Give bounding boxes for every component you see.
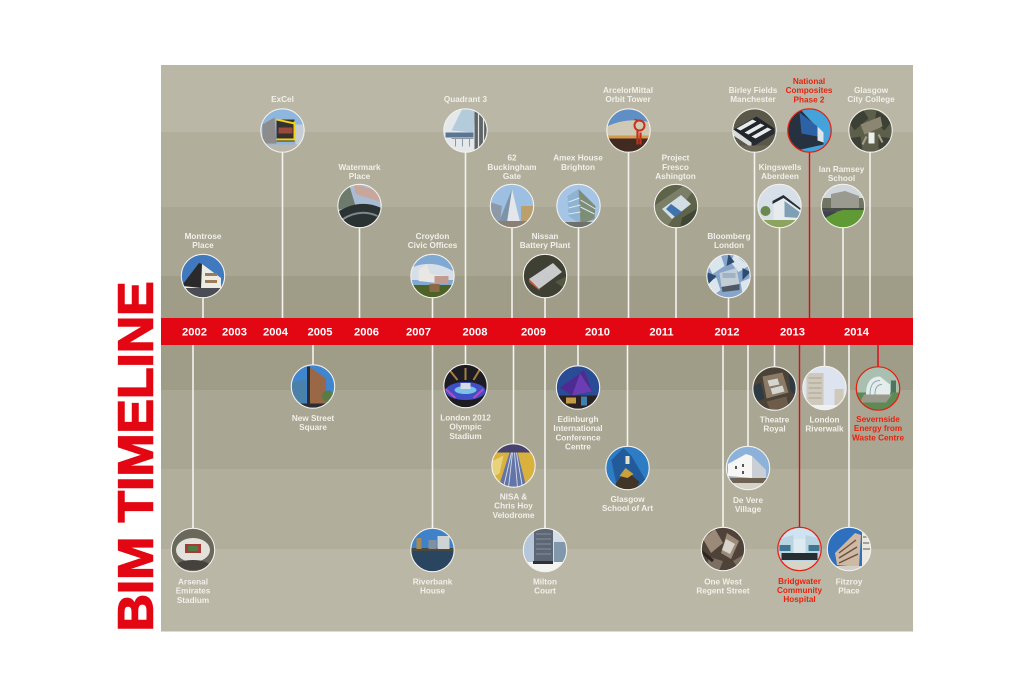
project: Project Fresco Ashington (2011): Ashington <box>655 172 696 181</box>
project: Montrose Place (2002): Montrose <box>185 232 222 241</box>
timeline bar with years: 2014 <box>844 326 870 338</box>
project: Watermark Place (2006): Watermark <box>338 163 381 172</box>
project: Nissan Battery Plant (2009): Nissan <box>532 232 558 241</box>
project: Quadrant 3 (2008): Quadrant 3 <box>444 95 488 104</box>
project: NISA and Chris Hoy Velodrome (2009): Velodrome <box>493 511 535 520</box>
timeline bar with years: 2002 <box>182 326 207 338</box>
project: Riverbank House (2007): Riverbank <box>413 578 453 586</box>
timeline bar with years: 2004 <box>263 326 289 338</box>
timeline bar with years: 2009 <box>521 326 546 338</box>
project: Ian Ramsey School (2014) <box>819 165 865 318</box>
project: Milton Court (2009): Milton <box>533 578 557 586</box>
project: London 2012 Olympic Stadium (2008): Olympic <box>449 423 482 432</box>
project: 62 Buckingham Gate (2008) <box>487 154 537 318</box>
project: Project Fresco Ashington (2011): Fresco <box>662 163 689 172</box>
project: London Riverwalk (2013) <box>802 345 846 434</box>
project: London 2012 Olympic Stadium (2008): London 2012 <box>440 414 491 422</box>
project: NISA and Chris Hoy Velodrome (2009): NISA & <box>500 492 527 502</box>
timeline bar with years: 2011 <box>649 326 674 338</box>
project: Birley Fields Manchester (2013): Birley Fields <box>729 86 778 95</box>
project: Watermark Place (2006) <box>338 163 382 318</box>
project: Severnside Energy from Waste Centre (2014, highlighted): Severnside <box>856 415 900 424</box>
project: Ian Ramsey School (2014): School <box>828 174 855 183</box>
project: Bloomberg London (2012) <box>706 232 751 318</box>
project: Edinburgh International Conference Centre (2010) <box>553 345 603 452</box>
project: Birley Fields Manchester (2013) <box>729 86 778 318</box>
project: Glasgow City College (2014): City College <box>847 95 895 104</box>
project: Edinburgh International Conference Centre (2010): Centre <box>565 443 591 452</box>
project: New Street Square (2005): New Street <box>292 414 334 423</box>
project: Theatre Royal (2013): Theatre <box>760 416 790 424</box>
project: Theatre Royal (2013): Royal <box>763 425 786 434</box>
project: Croydon Civic Offices (2007): Civic Offices <box>408 241 458 250</box>
project: Arsenal Emirates Stadium (2002) <box>171 345 215 605</box>
project: Kingswells Aberdeen (2013) <box>758 163 802 318</box>
project: Quadrant 3 (2008) <box>444 95 488 318</box>
project: Theatre Royal (2013) <box>752 345 796 434</box>
project: Severnside Energy from Waste Centre (2014, highlighted): Waste Centre <box>852 433 904 442</box>
project: London Riverwalk (2013): Riverwalk <box>805 425 844 434</box>
project: ArcelorMittal Orbit Tower (2010): ArcelorMittal <box>603 86 653 95</box>
project: Fitzroy Place (2014): Fitzroy <box>836 578 863 586</box>
project: One West Regent Street (2012): Regent Street <box>696 587 750 596</box>
project: Severnside Energy from Waste Centre (2014, highlighted) <box>852 345 904 442</box>
project: Glasgow School of Art (2010) <box>602 345 653 513</box>
timeline bar with years: 2005 <box>308 326 332 338</box>
project: One West Regent Street (2012): One West <box>704 578 742 586</box>
project: National Composites Phase 2 (2013, highlighted) <box>786 77 833 318</box>
project: Birley Fields Manchester (2013): Manchester <box>730 95 777 104</box>
timeline bar with years: 2006 <box>354 326 379 338</box>
project: Milton Court (2009): Court <box>534 587 556 596</box>
project: ArcelorMittal Orbit Tower (2010): Orbit Tower <box>605 95 651 104</box>
project: New Street Square (2005) <box>291 345 335 432</box>
project: Bridgwater Community Hospital (2013, highlighted) <box>777 345 822 604</box>
project: Bloomberg London (2012): London <box>714 241 744 250</box>
title: BIM Timeline: BIM TIMELINE <box>110 281 164 631</box>
project: Kingswells Aberdeen (2013): Kingswells <box>759 163 802 172</box>
project: Arsenal Emirates Stadium (2002): Emirates <box>176 587 211 596</box>
project: Glasgow City College (2014): Glasgow <box>854 86 889 95</box>
project: Fitzroy Place (2014): Place <box>838 587 860 596</box>
project: Croydon Civic Offices (2007) <box>408 232 458 318</box>
project: 62 Buckingham Gate (2008): Gate <box>503 172 522 181</box>
project: De Vere Village (2012): Village <box>735 505 762 514</box>
project: London 2012 Olympic Stadium (2008): Stadium <box>449 432 482 441</box>
project: Milton Court (2009) <box>523 345 567 596</box>
project: Bloomberg London (2012): Bloomberg <box>707 232 751 241</box>
project: National Composites Phase 2 (2013, highlighted): Composites <box>786 86 833 95</box>
project: Fitzroy Place (2014) <box>827 345 871 596</box>
project: Edinburgh International Conference Centre (2010): International <box>553 424 603 433</box>
project: National Composites Phase 2 (2013, highlighted): Phase 2 <box>794 95 825 104</box>
project: Amex House Brighton (2010) <box>553 154 603 318</box>
timeline bar with years: 2010 <box>585 326 610 338</box>
project: ExCel (2004): ExCel <box>271 95 294 104</box>
timeline bar with years: 2007 <box>406 326 431 338</box>
project: Montrose Place (2002) <box>181 232 225 318</box>
project: Arsenal Emirates Stadium (2002): Arsenal <box>178 578 208 586</box>
project: Riverbank House (2007): House <box>420 587 445 596</box>
project: Bridgwater Community Hospital (2013, highlighted): Bridgwater <box>778 577 822 586</box>
panel: striped background <box>161 65 913 632</box>
timeline bar with years: 2013 <box>780 326 805 338</box>
project: De Vere Village (2012): De Vere <box>733 496 763 505</box>
project: Riverbank House (2007) <box>410 345 454 596</box>
project: Glasgow School of Art (2010): Glasgow <box>610 495 645 504</box>
project: De Vere Village (2012) <box>726 345 770 514</box>
project: Montrose Place (2002): Place <box>192 241 214 250</box>
project: London Riverwalk (2013): London <box>809 416 840 424</box>
timeline bar with years: 2008 <box>463 326 487 338</box>
project: ExCel (2004) <box>260 95 304 318</box>
project: 62 Buckingham Gate (2008): Buckingham <box>487 163 537 172</box>
project: Amex House Brighton (2010): Amex House <box>553 154 603 163</box>
project: Croydon Civic Offices (2007): Croydon <box>416 232 449 241</box>
project: Severnside Energy from Waste Centre (2014, highlighted): Energy from <box>854 424 902 433</box>
timeline bar with years: 2012 <box>715 326 739 338</box>
project: Bridgwater Community Hospital (2013, highlighted): Hospital <box>783 595 816 604</box>
project: Ian Ramsey School (2014): Ian Ramsey <box>819 165 865 174</box>
project: ArcelorMittal Orbit Tower (2010) <box>603 86 653 318</box>
project: Glasgow City College (2014) <box>847 86 895 318</box>
project: Nissan Battery Plant (2009) <box>520 232 571 318</box>
timeline bar with years: 2003 <box>222 326 247 338</box>
timeline bar with years <box>161 318 913 345</box>
project: Edinburgh International Conference Centre (2010): Conference <box>555 433 601 442</box>
project: Watermark Place (2006): Place <box>349 172 371 181</box>
project: NISA and Chris Hoy Velodrome (2009) <box>492 345 536 520</box>
project: National Composites Phase 2 (2013, highlighted): National <box>793 77 825 86</box>
project: 62 Buckingham Gate (2008): 62 <box>507 154 517 163</box>
project: New Street Square (2005): Square <box>299 423 327 432</box>
project: Kingswells Aberdeen (2013): Aberdeen <box>761 172 799 181</box>
project: Arsenal Emirates Stadium (2002): Stadium <box>177 596 209 605</box>
project: London 2012 Olympic Stadium (2008) <box>440 345 491 441</box>
project: One West Regent Street (2012) <box>696 345 750 596</box>
project: Bridgwater Community Hospital (2013, highlighted): Community <box>777 586 822 595</box>
project: Project Fresco Ashington (2011): Project <box>662 154 690 163</box>
project: Glasgow School of Art (2010): School of Art <box>602 504 653 513</box>
project: Nissan Battery Plant (2009): Battery Plant <box>520 241 571 250</box>
project: NISA and Chris Hoy Velodrome (2009): Chris Hoy <box>494 502 533 511</box>
project: Edinburgh International Conference Centre (2010): Edinburgh <box>558 415 598 424</box>
project: Amex House Brighton (2010): Brighton <box>561 163 595 172</box>
project: Project Fresco Ashington (2011) <box>654 154 698 318</box>
